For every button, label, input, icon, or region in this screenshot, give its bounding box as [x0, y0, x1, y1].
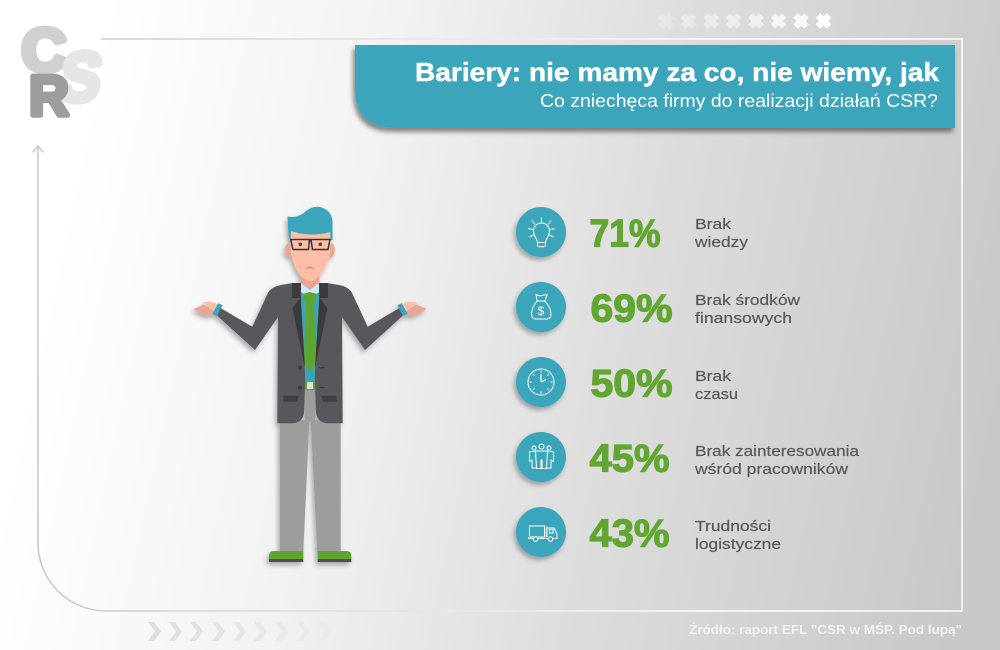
- label: Brak: [695, 216, 732, 233]
- value: 50%: [590, 362, 672, 406]
- CSR logo: S: [55, 37, 107, 116]
- label: Brak zainteresowania: [695, 443, 860, 460]
- face: [290, 228, 330, 281]
- label: Trudności: [695, 518, 771, 535]
- value: 69%: [590, 288, 672, 330]
- row: employee interest: [516, 432, 860, 482]
- label: Brak środków: [695, 292, 800, 309]
- icon: money bag: $: [538, 304, 545, 318]
- icon: truck: [516, 507, 566, 557]
- decorative crosses: [660, 16, 829, 26]
- label: logistyczne: [695, 536, 781, 553]
- row: logistics: [516, 507, 781, 557]
- trousers: [280, 388, 341, 552]
- jacket right: [315, 283, 403, 423]
- CSR logo: C: [22, 17, 66, 84]
- title: Bariery: nie mamy za co, nie wiemy, jak: [415, 57, 940, 87]
- header banner: [355, 45, 955, 128]
- row: funds: [516, 282, 800, 332]
- ears: [285, 243, 335, 257]
- row: time: [516, 357, 738, 407]
- label: wiedzy: [694, 234, 749, 251]
- label: wśród pracowników: [694, 461, 848, 478]
- left hand: [193, 302, 223, 316]
- CSR logo: [22, 17, 107, 128]
- source note: Źródło: raport EFL "CSR w MŚP. Pod lupą": [689, 622, 962, 637]
- icon: money bag: [516, 282, 566, 332]
- hair: [288, 207, 333, 242]
- icon: people: [516, 432, 566, 482]
- belt: [305, 381, 315, 390]
- buttons: [298, 366, 324, 390]
- icon: light bulb: [516, 207, 566, 257]
- label: czasu: [695, 386, 738, 403]
- tie: [303, 292, 317, 373]
- subtitle: Co zniechęca firmy do realizacji działań CSR?: [540, 90, 938, 111]
- right hand: [397, 302, 427, 316]
- jacket left: [217, 283, 305, 423]
- label: finansowych: [695, 310, 792, 327]
- mouth: [305, 266, 315, 270]
- value: 71%: [590, 212, 660, 256]
- CSR logo: R: [29, 64, 69, 128]
- value: 45%: [590, 438, 670, 480]
- illustration: shrugging man: [193, 207, 427, 562]
- eyes: [298, 242, 322, 246]
- icon: clock: [516, 357, 566, 407]
- glasses: [291, 240, 330, 250]
- decorative chevrons: [148, 622, 331, 641]
- neck: [301, 268, 319, 290]
- row: knowledge: [516, 207, 749, 257]
- label: Brak: [695, 368, 732, 385]
- shirt: [301, 283, 319, 382]
- shoes: [269, 551, 351, 562]
- value: 43%: [590, 512, 670, 556]
